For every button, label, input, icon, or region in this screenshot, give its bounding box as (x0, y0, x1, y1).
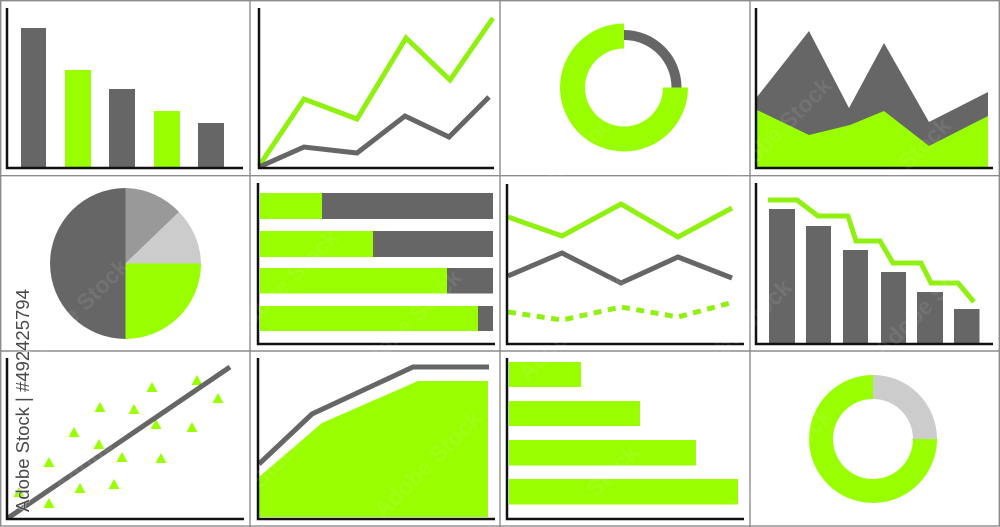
stock watermarks: Adobe Stock (679, 274, 797, 392)
axes (258, 183, 495, 344)
dark half slice (50, 188, 126, 339)
axes (507, 184, 744, 344)
stock watermarks: Adobe Stock (838, 112, 956, 230)
panel: pie chart (50, 188, 201, 339)
axes (756, 183, 993, 344)
stock watermarks: Adobe Stock (226, 224, 344, 342)
stock credit text: Adobe Stock | #492425794 (12, 289, 33, 512)
panel: three-series line chart (507, 184, 744, 344)
stock watermarks: Adobe Stock (369, 405, 487, 523)
stock watermarks: Stock (246, 430, 309, 493)
axes (7, 358, 244, 519)
gray bar segments (322, 193, 493, 331)
green arc (560, 24, 688, 152)
panel: area chart with line above (258, 358, 495, 519)
green area (757, 110, 988, 167)
stock watermarks: Adobe Stock (16, 253, 134, 371)
green slice (126, 264, 201, 339)
stock watermarks: Stock (581, 439, 644, 502)
columns (21, 28, 224, 168)
green segment (809, 375, 937, 503)
gray arc (624, 30, 682, 88)
scatter points (14, 375, 224, 508)
light gray slice (126, 212, 201, 264)
green bars (509, 362, 738, 504)
green area (259, 381, 488, 517)
axes (756, 8, 993, 168)
stock watermarks: Stock (908, 446, 971, 509)
green bar segments (260, 193, 478, 331)
green line (259, 18, 493, 166)
panel: columns with green trend line (756, 183, 993, 344)
stock watermarks: Adobe Stock (513, 268, 631, 386)
panel: horizontal bars (507, 358, 744, 519)
axes (507, 358, 744, 519)
axes (258, 358, 495, 519)
dashed green line (508, 302, 734, 320)
trend line (8, 367, 230, 518)
stock watermarks: Adobe Stock (719, 403, 837, 521)
panel: stacked area chart (756, 8, 993, 168)
stock watermarks: Adobe Stock (719, 72, 837, 190)
light gray segment (873, 375, 937, 439)
columns (769, 209, 980, 344)
green line (508, 204, 732, 237)
panel: progress donut (560, 24, 688, 152)
gray line (259, 367, 489, 464)
stock watermarks: Adobe Stock (869, 244, 987, 362)
gray line (508, 253, 732, 283)
panel: stacked horizontal bars (258, 183, 495, 344)
stock watermarks: Adobe Stock (509, 102, 627, 220)
axes (259, 8, 494, 168)
stock watermarks: Adobe Stock (349, 264, 467, 382)
panel: scatter plot (7, 358, 244, 519)
stock watermarks: Adobe Stock (49, 382, 167, 500)
gray area (757, 31, 988, 168)
panel: column chart (7, 8, 243, 168)
green stepped line (768, 200, 974, 302)
medium gray slice (126, 188, 179, 264)
gray line (259, 97, 489, 167)
axes (7, 8, 243, 168)
panel: two-series rising line chart (259, 8, 494, 168)
panel: donut chart (809, 375, 937, 503)
